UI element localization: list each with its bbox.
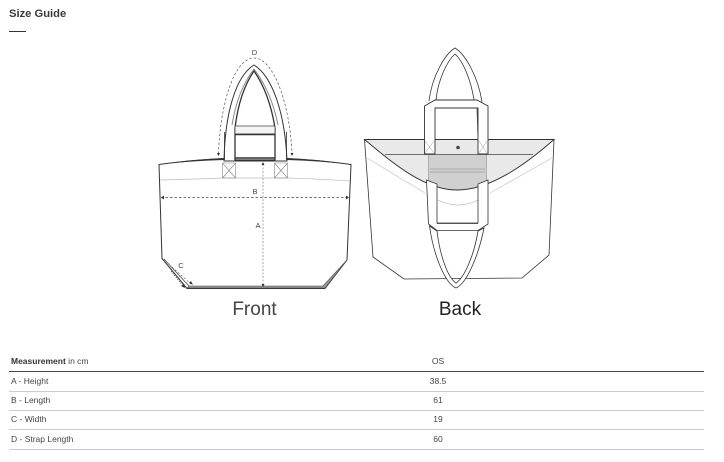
dimension D: D [252, 48, 258, 57]
dimension B [161, 187, 349, 200]
row: height: A - Height [11, 376, 48, 386]
row: width [11, 414, 443, 424]
flap outline [364, 140, 554, 190]
strap cross marks [425, 141, 487, 153]
back bag illustration [364, 48, 554, 288]
row: width: C - Width [11, 414, 46, 424]
stitch line [160, 178, 350, 181]
measurement table [9, 356, 704, 450]
front strap [224, 65, 287, 161]
dimension D [217, 48, 294, 156]
strap cross boxes [222, 163, 288, 178]
label: Front: Front [232, 299, 277, 320]
heading: Size Guide: Size Guide [9, 8, 66, 20]
inner pocket [428, 155, 486, 191]
table header: Measurement in cm [11, 356, 88, 366]
front bag body [159, 158, 351, 288]
back bag body [364, 140, 554, 279]
row: height: 38.5 [430, 376, 446, 386]
row: height [11, 376, 446, 386]
dimension C: C [178, 261, 184, 270]
row: width: 19 [433, 414, 443, 424]
back straps lower [426, 180, 488, 230]
row: length: B - Length [11, 394, 50, 404]
dimension C [171, 261, 193, 288]
row: length: 61 [433, 394, 443, 404]
dimension A [255, 162, 264, 287]
snap button [456, 146, 460, 149]
table header: OS [432, 356, 444, 366]
back straps upper [429, 48, 482, 102]
row: length [11, 394, 443, 404]
front bag illustration [159, 48, 351, 288]
row: strap length: D - Strap Length [11, 434, 73, 444]
row: strap length [11, 434, 443, 444]
dimension B: B [252, 187, 258, 196]
inner lining stitch lines [367, 158, 552, 205]
label: Back: Back [439, 299, 482, 320]
dimension A: A [255, 221, 261, 230]
back flap [364, 140, 554, 190]
row: strap length: 60 [433, 434, 443, 444]
table header [11, 356, 444, 366]
